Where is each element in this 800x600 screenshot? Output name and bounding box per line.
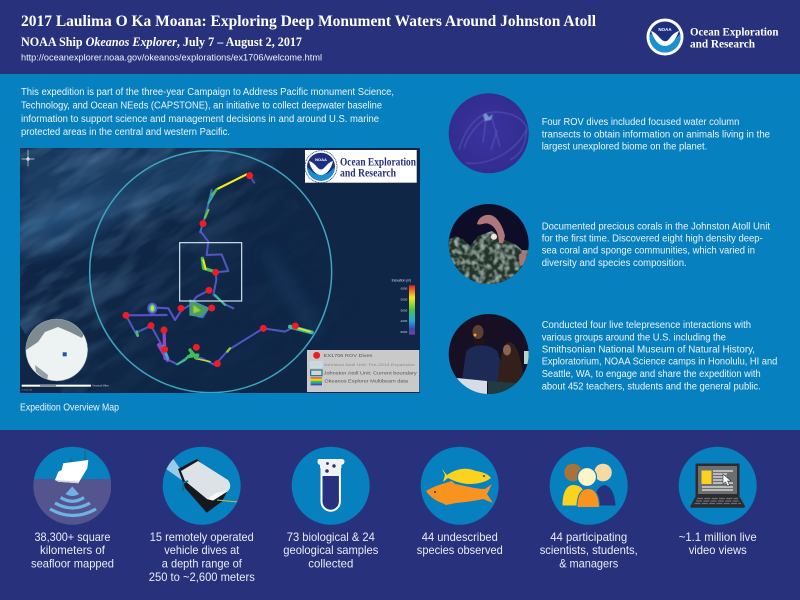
stat text: ~1.1 million live (679, 530, 757, 544)
stat: ROV dives (149, 447, 255, 584)
map legend: Johnston Atoll Unit: Pre-2014 Expansion (324, 363, 415, 367)
intro paragraph: Technology, and Ocean NEeds (CAPSTONE), an initiative to collect deepwater baseline (21, 100, 382, 112)
boundary circle (90, 151, 332, 393)
map caption: Expedition Overview Map (20, 402, 119, 414)
map logo box: NOAA (315, 157, 327, 162)
logo wordmark (690, 24, 779, 50)
elevation legend: -5000 (400, 330, 408, 334)
stat text: vehicle dives at (164, 543, 240, 557)
photo: jellyfish (448, 92, 530, 174)
finding text: Smithsonian National Museum of Natural History, (542, 344, 755, 355)
icon: remotely operated vehicle (163, 447, 241, 525)
elevation legend: -2000 (400, 297, 408, 301)
panel: expedition overview map (20, 148, 420, 393)
icon: NOAA logo: NOAA (658, 27, 672, 32)
stat: participants (540, 447, 638, 570)
elevation legend (392, 278, 415, 335)
stat text: species observed (417, 543, 503, 557)
multibeam survey tracks (126, 174, 312, 365)
ROV dive markers (122, 172, 299, 367)
stat text: collected (308, 556, 353, 570)
elevation legend: -4000 (400, 319, 408, 323)
finding text (542, 117, 770, 152)
icon: compass rose (22, 150, 34, 166)
stat text: video views (689, 543, 747, 557)
stat text (540, 530, 638, 570)
icon: group of people (550, 447, 628, 525)
finding text: Four ROV dives included focused water column (542, 117, 739, 128)
map legend: Okeanos Explorer Multibeam data (324, 379, 409, 384)
scale bar (22, 384, 109, 390)
icon: laptop (679, 447, 757, 525)
logo wordmark: and Research (690, 36, 755, 50)
stat text: 73 biological & 24 (287, 530, 375, 544)
finding text (542, 222, 770, 269)
finding text: about 452 teachers, students and the general public. (542, 381, 761, 392)
intro paragraph: This expedition is part of the three-year Campaign to Address Pacific monument Science, (21, 87, 394, 98)
stat text (679, 530, 757, 557)
stat text: seafloor mapped (31, 556, 114, 570)
finding text: transects to obtain information on animals living in the (542, 129, 770, 140)
panel: telepresence finding (448, 313, 777, 396)
stat text (283, 530, 378, 570)
icon: yellow and orange fish (421, 447, 499, 525)
panel: header band (0, 0, 800, 74)
stat: undescribed species (417, 447, 503, 557)
panel: blue body background (0, 74, 800, 430)
scale bar: 0 30 60 120 (22, 389, 33, 391)
seafloor relief (20, 148, 319, 393)
stat text: geological samples (283, 543, 378, 557)
panel: coral finding (448, 203, 770, 290)
intro paragraph (21, 87, 394, 138)
icon: NOAA logo (646, 18, 684, 56)
stat text: scientists, students, (540, 543, 638, 557)
stat text: a depth range of (162, 556, 242, 570)
elevation legend: Elevation (m) (392, 278, 411, 282)
finding text: Seattle, WA, to engage and share the expedition with (542, 369, 761, 380)
finding text: various groups around the U.S. including the (542, 332, 726, 343)
finding text: largest unexplored biome on the planet. (542, 141, 707, 152)
stat text: 44 undescribed (422, 530, 498, 544)
inset box: Johnston Atoll detail (180, 243, 242, 301)
stat text: kilometers of (40, 543, 106, 557)
photo: scientists at console (448, 313, 530, 396)
icon: test tube (292, 447, 370, 525)
inset globe locator (26, 318, 88, 382)
intro paragraph: information to support science and management decisions in and around U.S. marine (21, 114, 379, 125)
stat text: 44 participating (550, 530, 627, 544)
stat: video views (679, 447, 757, 557)
map legend (307, 350, 419, 392)
stat text: & managers (559, 556, 618, 570)
finding text: sea coral and sponge communities, which varied in (542, 246, 755, 257)
finding text: Conducted four live telepresence interactions with (542, 320, 751, 331)
expedition URL: http://oceanexplorer.noaa.gov/okeanos/explorations/ex1706/welcome.html (21, 52, 322, 64)
panel: water column finding (448, 92, 770, 174)
elevation legend: -3000 (400, 308, 408, 312)
panel: bottom statistics band (0, 430, 800, 600)
stat text (31, 530, 114, 570)
intro paragraph: protected areas in the central and western Pacific. (21, 127, 230, 138)
finding text (542, 320, 777, 392)
finding text: for the first time. Discovered eight high density deep- (542, 234, 763, 245)
map legend: Johnston Atoll Unit: Current boundary (324, 370, 418, 375)
elevation legend: -1000 (400, 286, 408, 290)
stat text: 38,300+ square (34, 530, 111, 544)
finding text: Exploratorium, NOAA Science camps in Honolulu, HI and (542, 357, 777, 368)
subtitle: NOAA Ship Okeanos Explorer, July 7 – August 2, 2017 (21, 35, 302, 49)
stat text: 15 remotely operated (150, 530, 254, 544)
stat: samples collected (283, 447, 378, 570)
stat text (417, 530, 503, 557)
photo: precious coral (448, 204, 529, 284)
map logo box: Ocean Exploration (340, 154, 416, 168)
scale bar: Nautical Miles (92, 384, 110, 388)
stat text (149, 530, 255, 584)
stat text: 250 to ~2,600 meters (149, 570, 255, 584)
map legend: EX1706 ROV Dives (324, 353, 372, 358)
icon: ship with sonar (33, 446, 111, 526)
logo wordmark: Ocean Exploration (690, 24, 779, 38)
finding text: diversity and species composition. (542, 258, 687, 269)
title: 2017 Laulima O Ka Moana: Exploring Deep Monument Waters Around Johnston Atoll (21, 13, 597, 30)
map logo box (305, 150, 417, 183)
map logo box: and Research (340, 165, 396, 179)
finding text: Documented precious corals in the Johnston Atoll Unit (542, 222, 770, 233)
stat: seafloor mapped (31, 446, 114, 570)
